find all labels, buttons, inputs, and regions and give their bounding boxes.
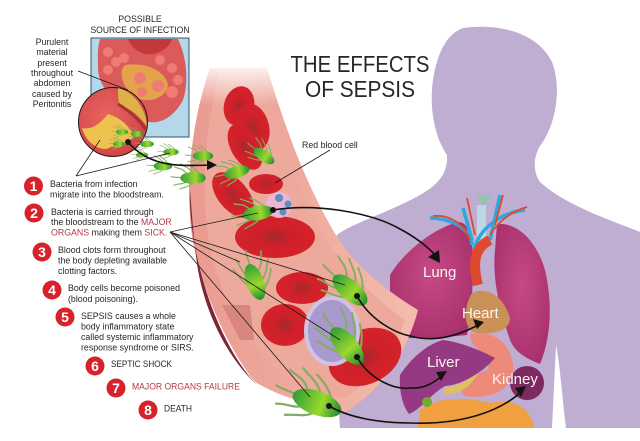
note: purulent material <box>31 37 74 109</box>
step 5 <box>56 308 194 352</box>
step 4: Body cells become poisoned <box>68 283 180 293</box>
note: purulent material: caused by <box>32 89 73 99</box>
step 3: the body depleting available <box>58 256 167 266</box>
title: THE EFFECTS <box>290 51 430 77</box>
step 2: the bloodstream to the MAJOR <box>51 217 172 227</box>
magnifier circle <box>78 88 148 156</box>
step 7: MAJOR ORGANS FAILURE <box>132 382 240 392</box>
heading: possible source of infection: SOURCE OF INFECTION <box>90 25 190 35</box>
bacteria <box>108 125 382 433</box>
organ labels: Liver <box>427 354 460 371</box>
step 2: Bacteria is carried through <box>51 207 154 217</box>
step 8: 8 <box>144 402 152 418</box>
step 3: clotting factors. <box>58 266 117 276</box>
blood vessel <box>189 60 418 412</box>
organs <box>390 195 550 428</box>
step 1 <box>24 176 164 200</box>
pointer lines <box>76 71 345 397</box>
trachea <box>477 205 486 239</box>
label: red blood cell: Red blood cell <box>302 140 358 150</box>
step 7: 7 <box>112 380 120 396</box>
kidney <box>510 366 544 400</box>
title: OF SEPSIS <box>305 76 415 102</box>
step 5: body inflammatory state <box>81 322 174 332</box>
organ labels: Lung <box>423 264 456 281</box>
heading: possible source of infection <box>90 14 190 35</box>
note: purulent material: material <box>36 47 68 57</box>
step 6 <box>86 356 172 376</box>
step 5: 5 <box>61 309 69 325</box>
note: purulent material: Purulent <box>36 37 69 47</box>
white blood cell <box>306 298 358 364</box>
heading: possible source of infection: POSSIBLE <box>118 14 162 24</box>
step 8: DEATH <box>164 404 192 414</box>
blue vessels <box>430 195 525 250</box>
step 3 <box>32 242 167 276</box>
left lung <box>390 222 473 338</box>
red blood cells <box>204 83 411 398</box>
step 5: response syndrome or SIRS. <box>81 342 194 352</box>
arrow heads and dots <box>125 139 526 409</box>
note: purulent material: present <box>37 58 67 68</box>
organ labels: Heart <box>462 305 500 322</box>
stomach <box>462 333 513 397</box>
step 5: called systemic inflammatory <box>81 332 194 342</box>
organ labels: Kidney <box>492 371 538 388</box>
gallbladder <box>443 373 478 394</box>
step 4: 4 <box>48 282 56 298</box>
step 2 <box>24 204 172 238</box>
step 3: Blood clots form throughout <box>58 245 166 255</box>
intestine <box>418 399 534 428</box>
step 1: 1 <box>30 178 38 194</box>
right lung <box>494 224 550 364</box>
step 2: ORGANS making them SICK. <box>51 228 167 238</box>
step 5: SEPSIS causes a whole <box>81 311 176 321</box>
source of infection picture <box>91 38 189 137</box>
step 4: (blood poisoning). <box>68 294 138 304</box>
title <box>290 51 430 102</box>
step 3: 3 <box>38 244 46 260</box>
step 1: migrate into the bloodstream. <box>50 190 164 200</box>
aorta <box>475 240 490 285</box>
arrows <box>128 142 522 423</box>
step 7 <box>106 378 240 398</box>
immune cell <box>266 192 292 218</box>
step 6: 6 <box>91 358 99 374</box>
step 6: SEPTIC SHOCK <box>111 359 172 369</box>
note: purulent material: throughout <box>31 68 74 78</box>
liver <box>400 340 495 414</box>
note: purulent material: Peritonitis <box>33 99 72 109</box>
step 2: 2 <box>30 205 38 221</box>
heart <box>466 291 510 333</box>
organ labels <box>423 264 538 388</box>
step 4 <box>42 280 180 304</box>
step 8 <box>138 400 192 420</box>
note: purulent material: abdomen <box>34 78 70 88</box>
body silhouette <box>334 27 640 428</box>
step 1: Bacteria from infection <box>50 179 138 189</box>
